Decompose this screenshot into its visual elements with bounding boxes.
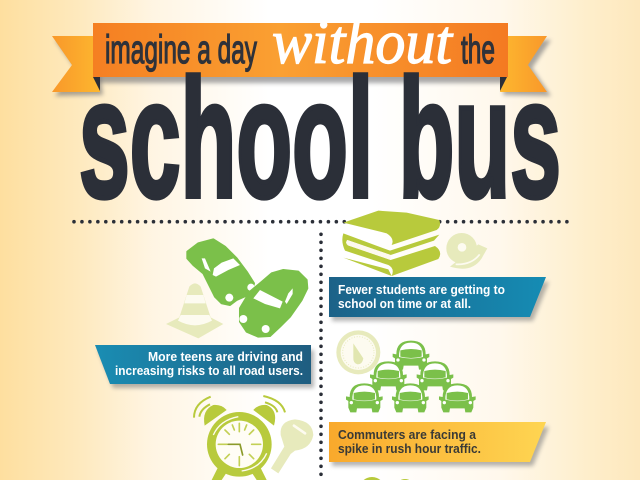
banner text: imagine a day: imagine a day	[105, 28, 257, 72]
callout: fewer students: Fewer students are getting to	[338, 283, 505, 297]
dotted divider: horizontal	[74, 220, 570, 223]
icon: stack of books	[342, 211, 440, 276]
icon: crashed cars	[187, 239, 307, 337]
banner text: the: the	[461, 28, 495, 72]
icon: traffic jam of cars	[346, 341, 476, 412]
icon: partially visible next icon	[359, 477, 414, 480]
callout: commuters: spike in rush hour traffic.	[338, 442, 481, 456]
panel: alarm clock and key	[194, 396, 313, 480]
panel: students late	[329, 211, 549, 321]
panel: teen drivers	[95, 239, 314, 388]
callout: fewer students: school on time or at all.	[338, 297, 471, 311]
icon: school bell	[446, 233, 487, 269]
icon: alarm clock	[194, 396, 285, 480]
callout: commuters	[329, 422, 549, 466]
callout: more teens driving: More teens are driving and	[148, 350, 303, 364]
callout: more teens driving: increasing risks to all road users.	[115, 364, 303, 378]
callout: more teens driving	[95, 345, 314, 388]
icon: car key	[271, 419, 313, 473]
banner text: without: without	[272, 9, 454, 77]
icon: traffic cone	[166, 283, 223, 338]
ribbon banner	[52, 9, 551, 96]
callout: commuters: Commuters are facing a	[338, 428, 477, 442]
callout: fewer students	[329, 277, 549, 321]
icon: speedometer	[336, 330, 380, 374]
dotted divider: vertical	[319, 234, 323, 480]
panel: rush hour traffic	[329, 330, 549, 466]
